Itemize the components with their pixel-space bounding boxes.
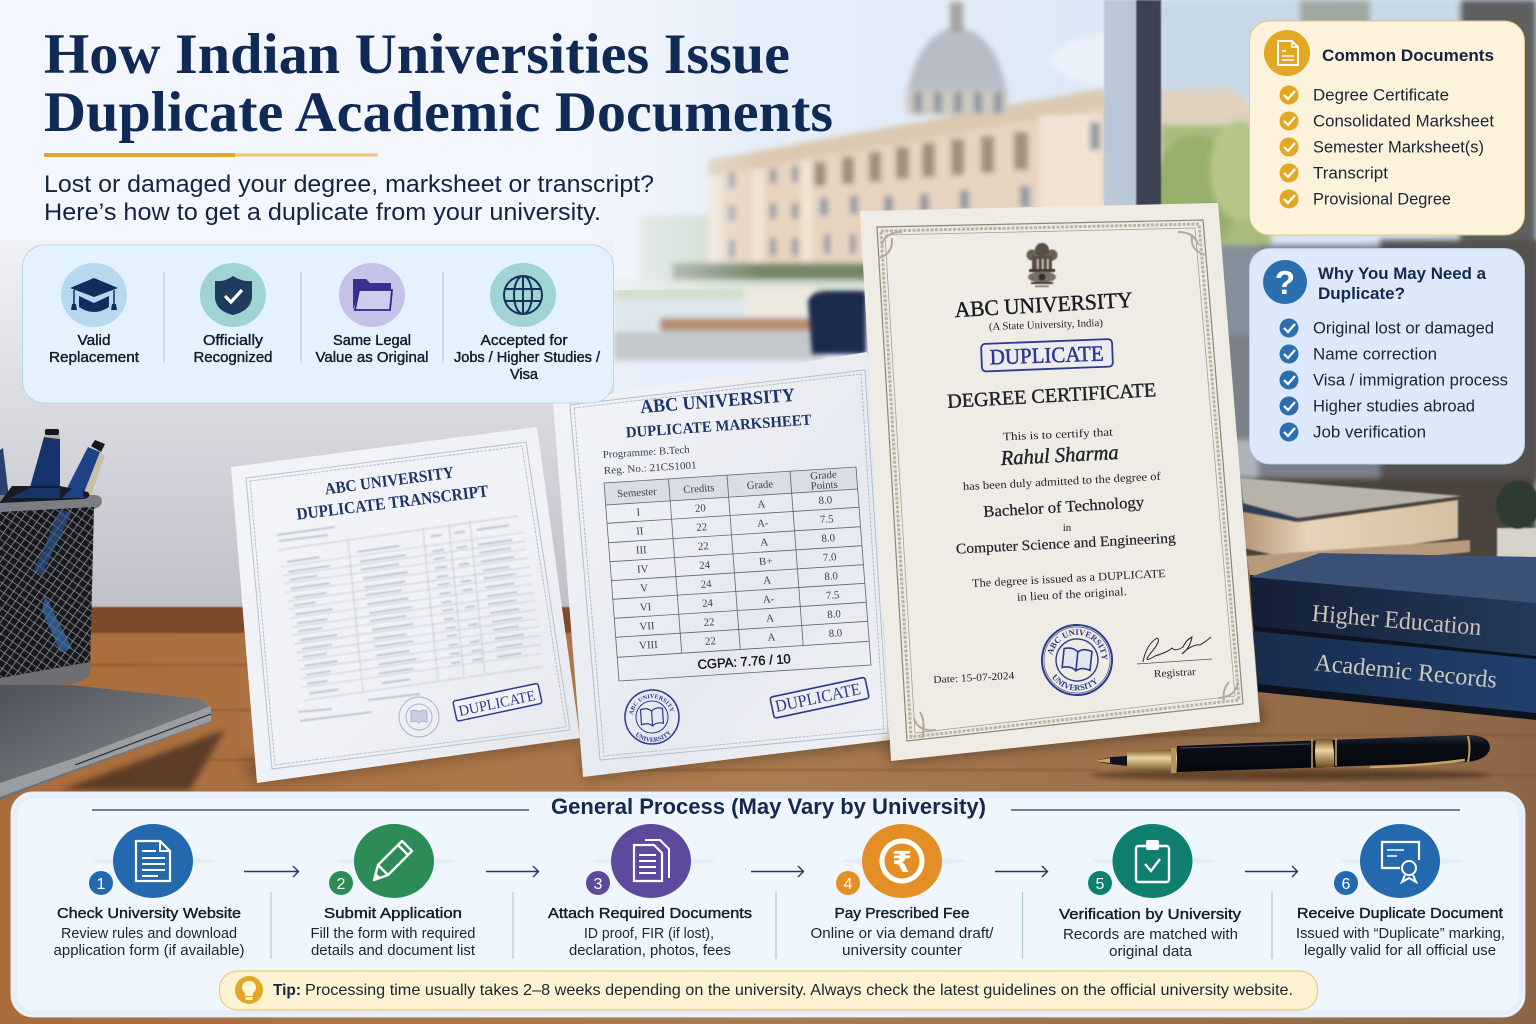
step 1 text: application form (if available)	[54, 942, 245, 959]
marksheet grade table: A-	[762, 593, 775, 606]
checklist: documents: Semester Marksheet(s)	[1313, 138, 1484, 156]
step 5 text: Records are matched with	[1063, 926, 1238, 943]
step 2 icon: pencil	[329, 824, 434, 898]
books: Higher Education and Academic Records	[1250, 553, 1536, 720]
certificate body text: Registrar	[1154, 667, 1197, 680]
step 1 icon: document: 1	[97, 876, 106, 893]
pen cup with pens	[0, 429, 105, 688]
marksheet grade table: Credits	[683, 482, 715, 496]
marksheet duplicate stamp: DUPLICATE	[773, 679, 862, 716]
background books	[1240, 478, 1536, 578]
step 6 text: legally valid for all official use	[1304, 942, 1496, 959]
marksheet heading: DUPLICATE MARKSHEET	[625, 412, 813, 441]
marksheet grade table: VIII	[639, 639, 659, 652]
step 4 text	[810, 905, 994, 959]
marksheet grade table: 8.0	[828, 627, 843, 640]
marksheet programme details: Reg. No.: 21CS1001	[604, 460, 697, 477]
panel: why you may need a duplicate	[1250, 248, 1524, 464]
marksheet grade table: 8.0	[824, 570, 838, 583]
transcript heading: ABC UNIVERSITY	[324, 463, 455, 498]
marksheet grade table: A-	[757, 517, 769, 530]
marksheet grade table: Grade	[810, 469, 837, 482]
university name: ABC UNIVERSITY	[954, 287, 1133, 322]
step 2 text: Fill the form with required	[310, 925, 476, 942]
document: degree certificate	[860, 203, 1269, 768]
checklist: reasons: Name correction	[1313, 346, 1437, 364]
step 1 text: Review rules and download	[61, 925, 237, 942]
step 3	[548, 824, 752, 959]
duplicate stamp: DUPLICATE	[989, 341, 1104, 369]
university seal	[1040, 624, 1113, 696]
benefit labels: Officially	[203, 333, 264, 349]
step 5 text: Verification by University	[1059, 906, 1242, 923]
marksheet grade table: 7.0	[823, 551, 837, 564]
checklist: reasons: Job verification	[1313, 424, 1426, 442]
icon: document	[1264, 30, 1310, 76]
benefit labels: Value as Original	[316, 350, 428, 366]
university name: (A State University, India)	[989, 318, 1104, 333]
fountain pen	[1090, 735, 1490, 781]
university seal: UNIVERSITY	[1052, 674, 1098, 690]
step 6 text: Issued with “Duplicate” marking,	[1296, 925, 1505, 942]
icon: question mark: ?	[1275, 264, 1295, 301]
step wisps	[93, 858, 1464, 864]
marksheet grade table: Points	[810, 479, 838, 492]
checklist: reasons: Visa / immigration process	[1313, 372, 1508, 390]
laptop	[0, 685, 225, 800]
subtitle: Lost or damaged your degree, marksheet or transcript?	[44, 171, 654, 198]
marksheet seal	[624, 689, 680, 745]
transcript border	[246, 442, 570, 769]
title: How Indian Universities Issue	[44, 23, 790, 86]
marksheet grade table: CGPA: 7.76 / 10	[697, 651, 791, 672]
certificate body text: Computer Science and Engineering	[956, 530, 1176, 558]
title: Duplicate Academic Documents	[44, 81, 833, 144]
step 5 icon: clipboard: 5	[1096, 876, 1105, 893]
step 5	[1059, 824, 1242, 960]
marksheet grade table: 20	[695, 502, 706, 515]
subtitle: Here’s how to get a duplicate from your university.	[44, 199, 601, 226]
step 6 icon: certificate with ribbon: 6	[1342, 876, 1351, 893]
checklist: documents: Consolidated Marksheet	[1313, 112, 1494, 130]
marksheet grade table: 22	[696, 521, 708, 534]
process arrows	[244, 866, 1298, 877]
checklist: documents	[1280, 86, 1494, 208]
step 4 text: Online or via demand draft/	[810, 925, 994, 942]
marksheet grade table: 7.5	[825, 589, 840, 602]
step 5 text: original data	[1109, 943, 1193, 960]
certificate body text: in lieu of the original.	[1017, 586, 1127, 604]
step 4 icon: rupee coin	[836, 824, 942, 898]
step 2	[310, 824, 476, 959]
marksheet heading: ABC UNIVERSITY	[639, 385, 796, 418]
step 6	[1296, 824, 1505, 959]
tip callout: Processing time usually takes 2–8 weeks depending on the university. Always check the latest guidelines on the official university website.	[305, 982, 1293, 999]
step 1 text: Check University Website	[57, 905, 241, 922]
checklist: reasons: Higher studies abroad	[1313, 398, 1475, 416]
books: Higher Education and Academic Records: Higher Education	[1311, 600, 1482, 641]
step 5 text	[1059, 906, 1242, 960]
step 4 icon: rupee coin: 4	[844, 876, 853, 893]
document: duplicate transcript	[231, 427, 590, 786]
marksheet grade table: 22	[705, 635, 716, 648]
marksheet grade table: 24	[700, 578, 713, 591]
room wall	[0, 240, 614, 615]
certificate border	[877, 220, 1243, 741]
step 6 text: Receive Duplicate Document	[1297, 905, 1504, 922]
marksheet grade table: Grade	[746, 478, 774, 492]
checklist: documents: Provisional Degree	[1313, 190, 1451, 208]
step 2 text	[310, 905, 476, 959]
marksheet grade table: A	[760, 536, 769, 549]
marksheet grade table: 24	[702, 597, 714, 610]
certificate body text	[933, 379, 1197, 686]
icon: folder	[339, 263, 405, 327]
step 3 text: Attach Required Documents	[548, 905, 752, 922]
document: duplicate marksheet	[553, 352, 890, 784]
marksheet seal: ABC UNIVERSITY	[630, 694, 674, 715]
benefit labels: Recognized	[194, 350, 272, 366]
heading: why duplicate: Duplicate?	[1318, 284, 1405, 303]
checklist: documents: Transcript	[1313, 164, 1388, 182]
university seal: ABC UNIVERSITY	[1048, 629, 1108, 660]
step 4 text: Pay Prescribed Fee	[834, 905, 970, 922]
step 3 icon: stacked documents	[586, 824, 691, 898]
step 4 icon: rupee coin: ₹	[892, 845, 912, 879]
certificate body text: DEGREE CERTIFICATE	[947, 379, 1157, 413]
step 6 icon: certificate with ribbon	[1334, 824, 1440, 898]
marksheet grade table: 8.0	[818, 494, 833, 507]
transcript heading: DUPLICATE TRANSCRIPT	[295, 481, 490, 524]
subtitle	[44, 171, 654, 226]
certificate body text: Bachelor of Technology	[983, 494, 1145, 521]
transcript small info lines	[277, 527, 420, 721]
marksheet grade table: A	[763, 574, 772, 587]
benefit labels: Accepted for	[480, 333, 568, 349]
tip callout	[220, 971, 1318, 1010]
transcript table	[278, 512, 543, 702]
marksheet grade table: I	[636, 506, 641, 519]
national emblem	[1026, 243, 1058, 287]
step 5 icon: clipboard	[1088, 824, 1192, 898]
benefit labels	[49, 333, 601, 383]
heading: why duplicate	[1318, 264, 1487, 303]
navy chair	[808, 291, 866, 354]
title	[44, 23, 833, 144]
marksheet grade table: B+	[759, 555, 773, 568]
marksheet grade table: III	[635, 544, 648, 557]
certificate body text: The degree is issued as a DUPLICATE	[972, 568, 1166, 590]
benefit labels: Jobs / Higher Studies /	[454, 350, 601, 366]
marksheet grade table: A	[766, 612, 775, 625]
certificate body text: Rahul Sharma	[999, 440, 1119, 470]
transcript seal	[399, 697, 439, 737]
marksheet grade table: 7.5	[820, 513, 834, 526]
transcript heading	[295, 463, 490, 524]
marksheet grade table: VII	[639, 620, 655, 633]
step 3 text: ID proof, FIR (if lost),	[584, 925, 714, 942]
marksheet grade table: 22	[703, 616, 715, 629]
title underline	[44, 153, 378, 157]
window frame	[1104, 0, 1161, 215]
step 6 text	[1296, 905, 1505, 959]
step 3 text: declaration, photos, fees	[569, 942, 731, 959]
heading: common documents: Common Documents	[1322, 46, 1494, 65]
step 1	[54, 824, 245, 959]
step 2 text: details and document list	[311, 942, 476, 959]
marksheet grade table: Semester	[617, 486, 658, 500]
marksheet grade table: A	[757, 498, 766, 511]
marksheet heading	[625, 385, 813, 441]
transcript duplicate stamp: DUPLICATE	[457, 688, 537, 720]
benefit labels: Replacement	[49, 350, 139, 366]
icon: graduation cap	[61, 263, 127, 327]
marksheet grade table	[604, 467, 871, 681]
window view: blurred university building	[614, 0, 1536, 578]
step 3 icon: stacked documents: 3	[594, 876, 603, 893]
benefit labels: Visa	[510, 367, 539, 383]
benefit labels: Same Legal	[333, 333, 411, 349]
step 2 icon: pencil: 2	[337, 876, 346, 893]
heading: why duplicate: Why You May Need a	[1318, 264, 1487, 283]
checklist: reasons	[1280, 318, 1508, 442]
step 1 icon: document	[89, 824, 193, 898]
marksheet seal: UNIVERSITY	[636, 730, 670, 742]
wooden desk	[0, 618, 1536, 1024]
icon: light bulb	[235, 976, 263, 1004]
marksheet grade table: 8.0	[827, 608, 841, 621]
marksheet programme details	[603, 445, 697, 477]
step 1 text	[54, 905, 245, 959]
step 2 text: Submit Application	[324, 905, 462, 922]
marksheet grade table: II	[636, 525, 644, 538]
step 4 text: university counter	[842, 942, 962, 959]
marksheet border	[570, 370, 888, 760]
icon: shield with check	[200, 263, 266, 327]
registrar signature	[1137, 637, 1212, 664]
books: Higher Education and Academic Records: Academic Records	[1313, 649, 1498, 694]
panel: common documents	[1250, 21, 1524, 235]
certificate body text: has been duly admitted to the degree of	[963, 471, 1161, 493]
checklist: reasons: Original lost or damaged	[1313, 320, 1494, 338]
benefit labels: Valid	[78, 333, 110, 349]
step 3 text	[548, 905, 752, 959]
icon: question mark	[1263, 260, 1307, 304]
checklist: documents: Degree Certificate	[1313, 86, 1449, 104]
certificate body text: in	[1063, 522, 1072, 534]
panel: general process	[11, 792, 1525, 1017]
marksheet grade table: A	[767, 631, 776, 644]
process heading: General Process (May Vary by University)	[551, 794, 986, 819]
marksheet grade table: 22	[697, 540, 709, 553]
icon: globe	[490, 263, 556, 327]
step 4	[810, 824, 994, 959]
marksheet grade table: 24	[699, 559, 711, 572]
marksheet grade table: IV	[637, 563, 649, 576]
marksheet grade table: 8.0	[821, 532, 835, 545]
certificate body text: This is to certify that	[1003, 427, 1114, 443]
marksheet grade table: VI	[639, 601, 652, 614]
panel: key benefits	[22, 245, 614, 403]
marksheet programme details: Programme: B.Tech	[603, 445, 691, 461]
certificate body text: Date: 15-07-2024	[933, 671, 1015, 686]
marksheet grade table: V	[640, 582, 649, 595]
tip callout: Tip:	[273, 982, 301, 999]
